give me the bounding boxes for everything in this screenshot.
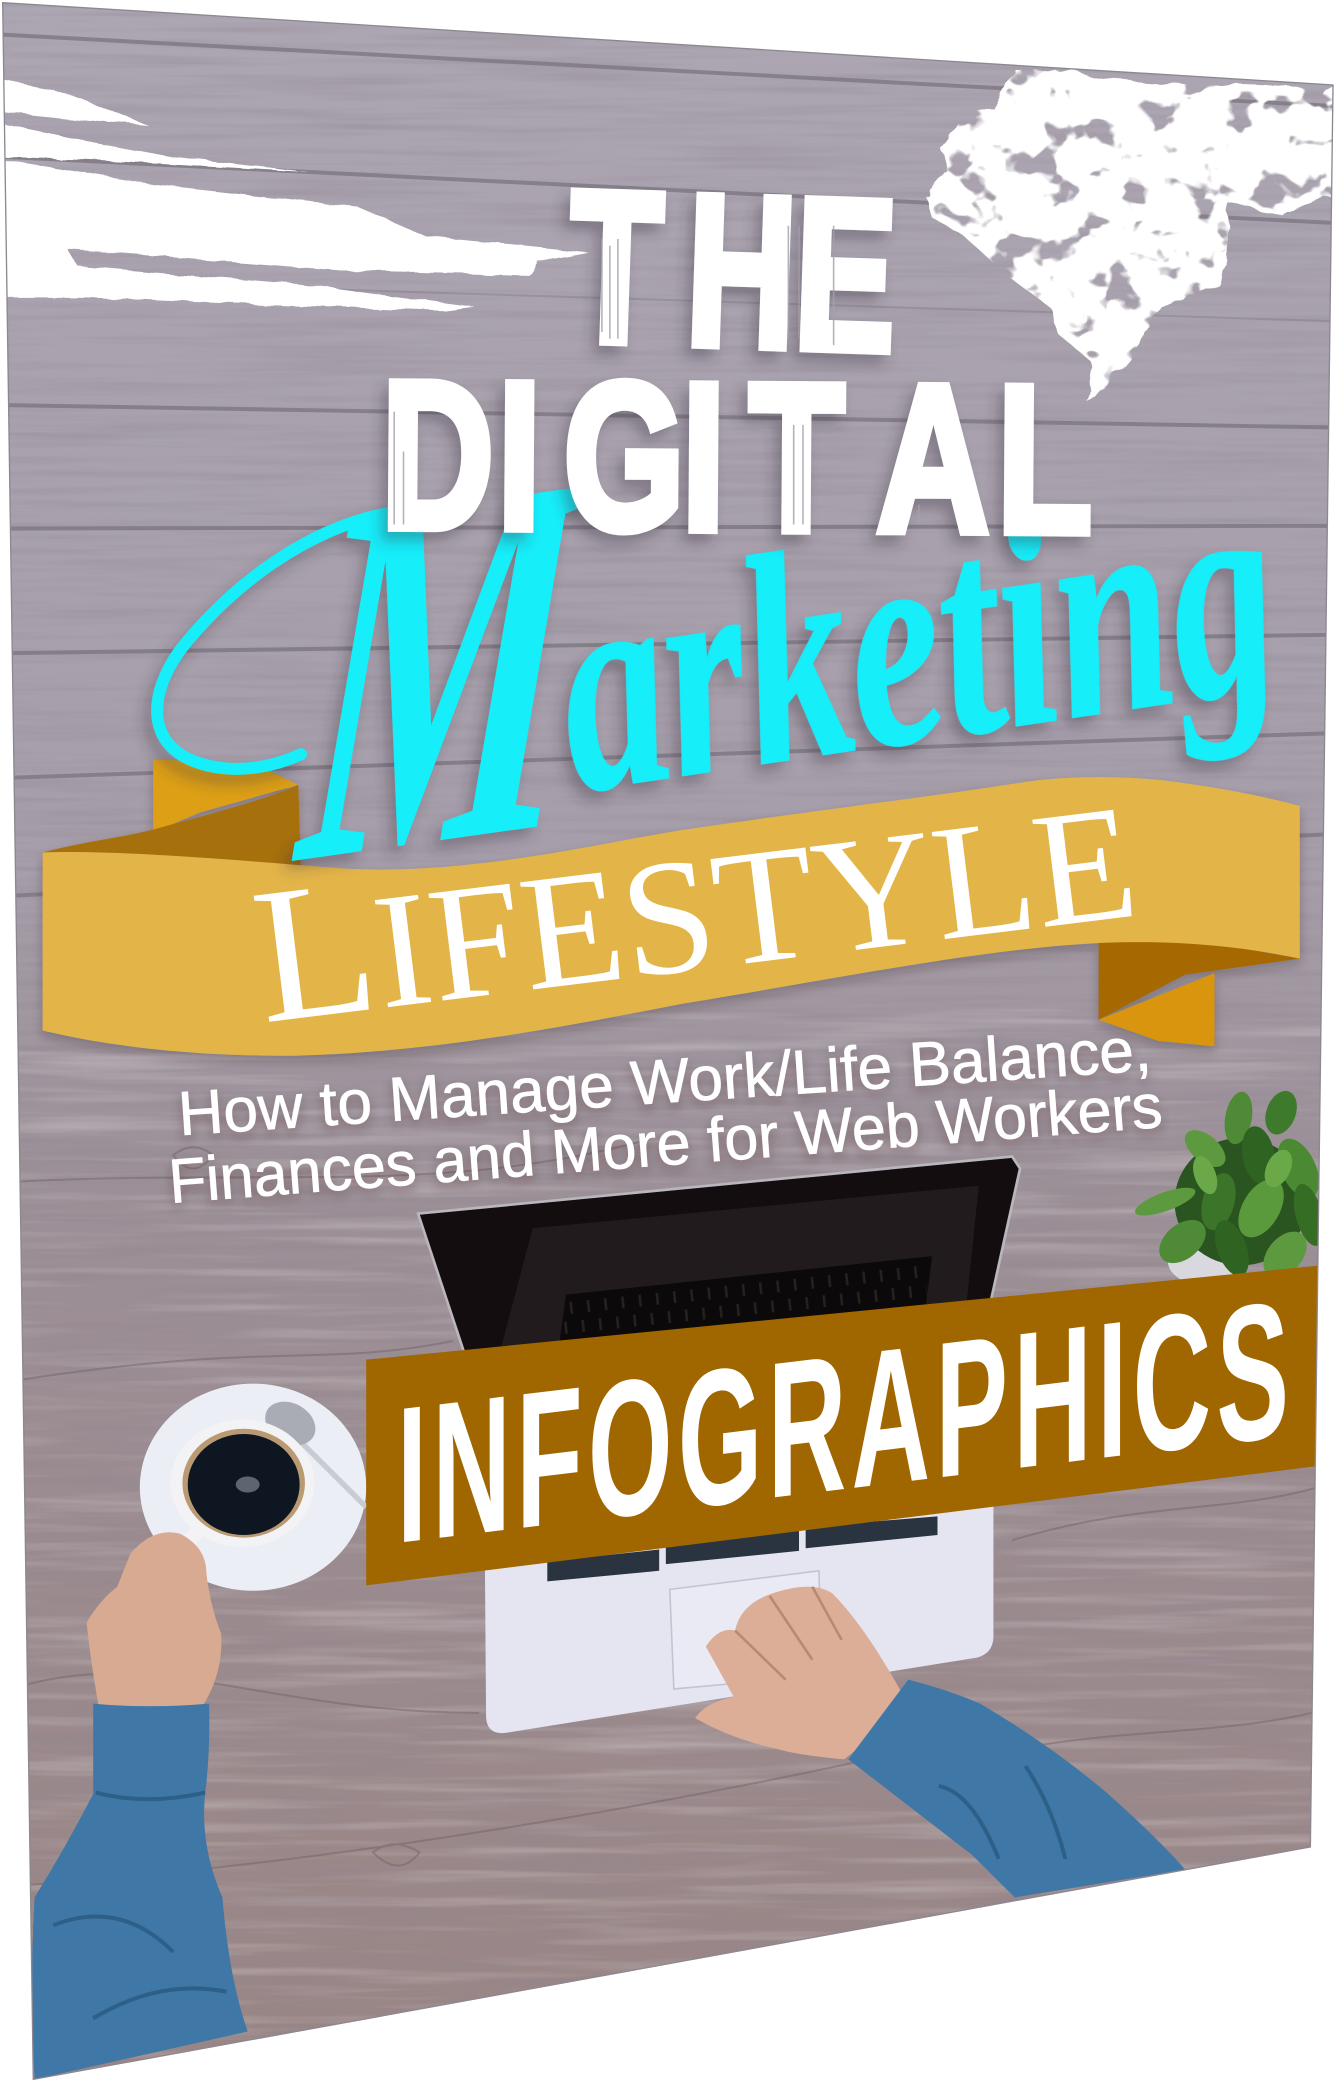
title: THE: THE [566, 146, 900, 397]
word INFOGRAPHICS: INFOGRAPHICS [397, 1259, 1294, 1584]
reflected keyboard [559, 1256, 932, 1344]
saucer [140, 1384, 366, 1591]
ribbon left back fold [153, 760, 298, 833]
swash of M [157, 511, 400, 769]
ribbon left dark fold [43, 785, 301, 876]
cup [170, 1419, 314, 1547]
plant [1135, 1090, 1318, 1280]
left sleeve [32, 1704, 248, 2079]
lower desk streaks [0, 1009, 1337, 2082]
letter M: M [283, 364, 605, 973]
right hand [695, 1587, 906, 1759]
white brush strokes left [0, 80, 589, 311]
infographics banner [366, 1259, 1321, 1585]
ribbon body [43, 777, 1300, 1056]
screen reflection [499, 1186, 979, 1354]
ribbon right dark fold [1099, 923, 1300, 1020]
subtitle line 1: How to Manage Work/Life Balance, [176, 1013, 1153, 1149]
coffee [188, 1434, 300, 1535]
laptop [418, 1157, 1020, 1733]
plant leaves [1132, 1086, 1330, 1286]
laptop base [485, 1494, 993, 1733]
subtitle [166, 1013, 1165, 1216]
coffee cup and saucer [140, 1384, 366, 1591]
subtitle line 2: Finances and More for Web Workers [166, 1070, 1165, 1216]
laptop screen [418, 1157, 1020, 1354]
banner background [366, 1265, 1321, 1585]
white paint splash top right [927, 70, 1337, 402]
touchpad [670, 1571, 822, 1689]
cup handle [176, 1530, 200, 1554]
title: Marketing [138, 488, 1266, 876]
plant pot [1168, 1238, 1242, 1285]
wood grain texture [4, 4, 1330, 870]
plant foliage shadow [1175, 1138, 1308, 1265]
spoon [290, 1431, 366, 1507]
word LIFESTYLE: LIFESTYLE [243, 744, 1147, 1065]
title: DIGITAL: DIGITAL [381, 339, 1093, 577]
ribbon banner [43, 744, 1300, 1065]
left hand [87, 1532, 221, 1706]
right sleeve [848, 1680, 1185, 1897]
keyboard keys [547, 1516, 937, 1581]
ribbon right back fold [1099, 973, 1214, 1046]
